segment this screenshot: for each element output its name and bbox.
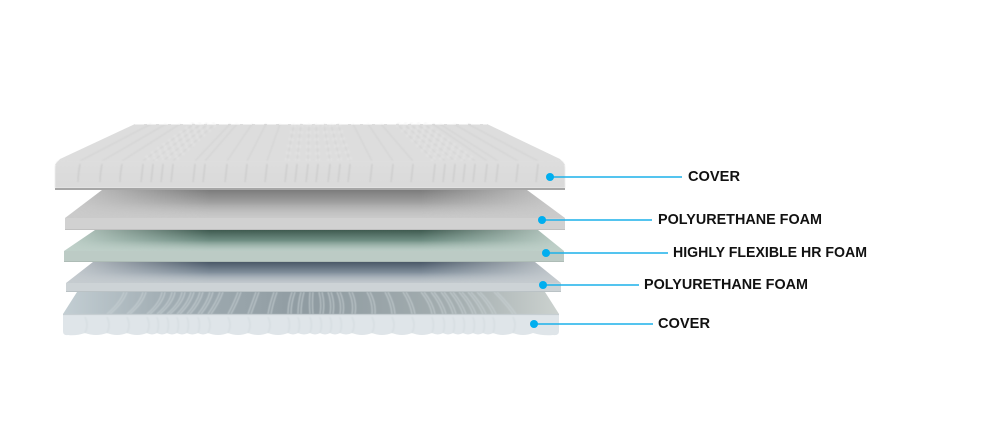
front edge of HR foam <box>64 251 564 262</box>
top surface of HR foam <box>64 230 564 251</box>
callout: highly flexible HR foam <box>542 244 867 261</box>
layer: bottom cover <box>63 292 559 335</box>
top surface of lower foam <box>66 262 561 283</box>
callout: polyurethane foam (upper): POLYURETHANE FOAM <box>658 211 822 228</box>
layer: highly flexible HR foam <box>64 230 564 262</box>
callout: highly flexible HR foam: HIGHLY FLEXIBLE HR FOAM <box>673 244 867 261</box>
top surface of bottom cover <box>63 292 559 314</box>
callout: polyurethane foam (lower) <box>539 276 808 293</box>
bottom edge of top cover <box>55 188 565 190</box>
layer: polyurethane foam upper <box>65 190 565 230</box>
layer: polyurethane foam lower <box>66 262 561 292</box>
top surface of upper foam <box>65 190 565 218</box>
callout: polyurethane foam (upper) <box>538 211 822 228</box>
callout: cover (bottom): COVER <box>658 315 710 332</box>
callout: polyurethane foam (lower): POLYURETHANE FOAM <box>644 276 808 293</box>
top surface of top cover <box>55 124 565 165</box>
layer: top cover <box>55 124 565 190</box>
callout: cover (bottom) <box>530 315 710 332</box>
top edge bumps <box>135 123 487 125</box>
callout: cover (top): COVER <box>688 168 740 185</box>
front edge of lower foam <box>66 283 561 292</box>
front edge of upper foam <box>65 218 565 230</box>
callout: cover (top) <box>546 168 740 185</box>
infographic: mattress layers diagram <box>54 123 866 336</box>
front scalloped edge of bottom cover <box>63 314 559 335</box>
front face of top cover <box>55 160 565 188</box>
